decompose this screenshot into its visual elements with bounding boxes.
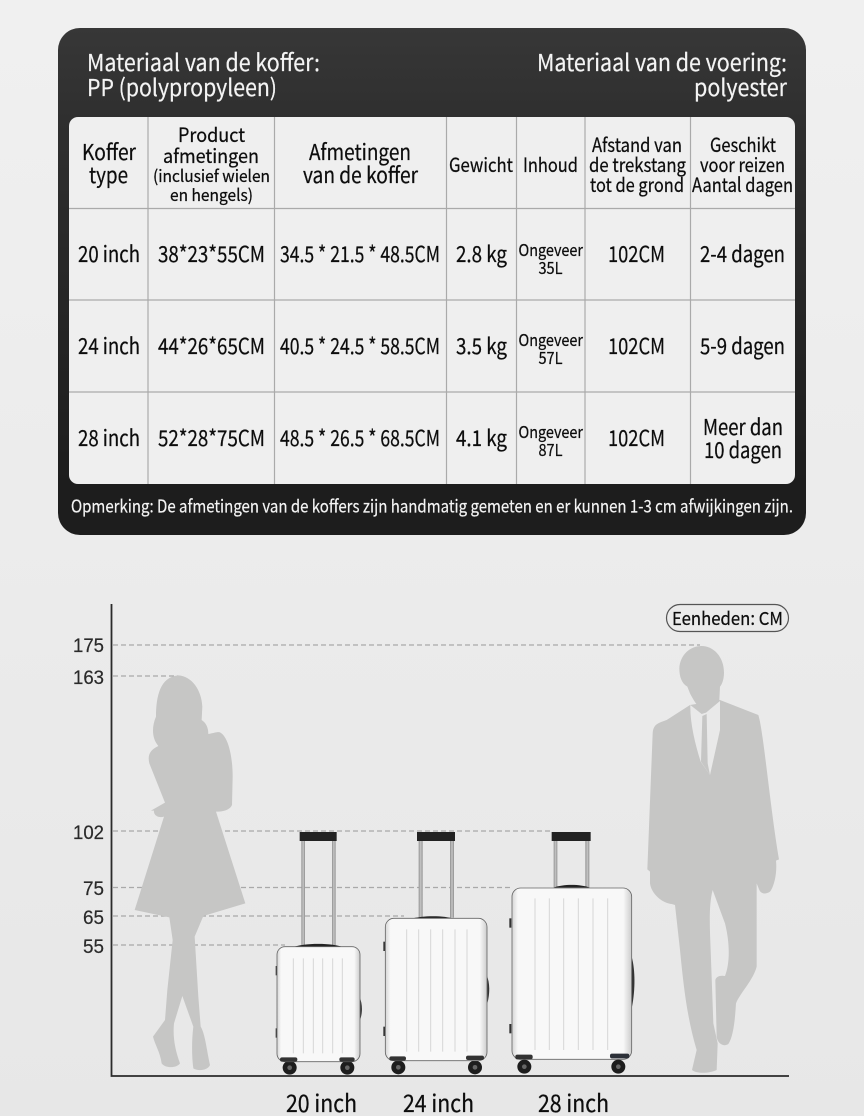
table row: 20 inch: 20 inch <box>78 237 140 269</box>
table row: 20 inch: 2.8 kg <box>456 237 507 269</box>
table row: 20 inch <box>78 237 785 279</box>
table row: 28 inch: 48.5 * 26.5 * 68.5CM <box>280 421 440 453</box>
table header row: Afstand van <box>592 129 682 158</box>
table row: 20 inch: 102CM <box>608 237 665 269</box>
table row: 24 inch: 24 inch <box>78 329 140 361</box>
icon: man silhouette <box>647 646 779 1073</box>
table row: 20 inch: 35L <box>538 255 563 279</box>
table row: 28 inch: Ongeveer <box>518 419 584 443</box>
table row: 28 inch: 10 dagen <box>704 433 782 465</box>
table <box>69 117 795 484</box>
table header row: Product <box>178 119 246 148</box>
axis height labels: 102 <box>73 823 104 844</box>
table row: 20 inch: 2-4 dagen <box>700 237 785 269</box>
table header row: voor reizen <box>700 149 785 178</box>
axis height labels: 55 <box>83 937 104 958</box>
axis height labels: 175 <box>73 636 104 657</box>
table header row: en hengels) <box>170 182 253 206</box>
table row: 24 inch: 3.5 kg <box>456 329 507 361</box>
icon: 24 inch suitcase <box>383 832 489 1074</box>
units badge: Eenheden: CM <box>672 605 783 631</box>
axis height labels: 163 <box>73 668 104 689</box>
icon: 20 inch suitcase <box>276 832 362 1075</box>
table row: 24 inch: 102CM <box>608 329 665 361</box>
chart: height comparison <box>73 604 789 1116</box>
table header row: de trekstang <box>589 149 686 178</box>
table header row: Afmetingen <box>309 135 411 167</box>
table row: 28 inch: 4.1 kg <box>456 421 507 453</box>
table header row: (inclusief wielen <box>153 163 270 187</box>
heading: case material: Materiaal van de koffer: <box>87 44 320 78</box>
table header row: tot de grond <box>590 169 684 198</box>
table header row: Inhoud <box>523 149 578 178</box>
heading: case material <box>87 44 320 103</box>
axis height labels: 65 <box>83 908 104 929</box>
table header row: Aantal dagen <box>692 169 793 198</box>
axis height labels <box>73 636 104 958</box>
table row: 24 inch: 57L <box>538 345 563 369</box>
table row: 24 inch: 5-9 dagen <box>700 329 785 361</box>
heading: lining material <box>537 44 788 103</box>
panel: specification table <box>58 28 806 535</box>
axis height labels: 75 <box>83 879 104 900</box>
table row: 28 inch: Meer dan <box>703 410 783 442</box>
icon: 28 inch suitcase <box>509 832 634 1074</box>
table header row: type <box>89 158 128 190</box>
table row: 28 inch: 28 inch <box>78 421 140 453</box>
suitcase size labels <box>286 1085 609 1116</box>
heading: case material: PP (polypropyleen) <box>87 69 277 103</box>
table row: 24 inch: 40.5 * 24.5 * 58.5CM <box>280 329 440 361</box>
chart axes <box>112 604 789 1076</box>
table row: 28 inch <box>78 410 783 465</box>
table row: 24 inch: Ongeveer <box>518 327 584 351</box>
table header row: van de koffer <box>303 158 418 190</box>
table row: 28 inch: 87L <box>538 437 563 461</box>
table row: 24 inch <box>78 327 785 369</box>
table header row: Gewicht <box>449 149 514 178</box>
table row: 28 inch: 52*28*75CM <box>158 421 265 453</box>
table header row: afmetingen <box>163 140 259 169</box>
table row: 20 inch: 34.5 * 21.5 * 48.5CM <box>280 237 440 269</box>
table row: 20 inch: 38*23*55CM <box>158 237 265 269</box>
table row: 20 inch: Ongeveer <box>518 237 584 261</box>
icon: woman silhouette <box>135 675 245 1070</box>
heading: lining material: polyester <box>694 69 788 103</box>
table header row: Geschikt <box>710 129 777 158</box>
table header row <box>82 119 793 206</box>
dashed height guides <box>113 645 700 945</box>
table header row: Koffer <box>82 135 136 167</box>
heading: lining material: Materiaal van de voering: <box>537 44 787 78</box>
table row: 28 inch: 102CM <box>608 421 665 453</box>
table row: 24 inch: 44*26*65CM <box>158 329 265 361</box>
